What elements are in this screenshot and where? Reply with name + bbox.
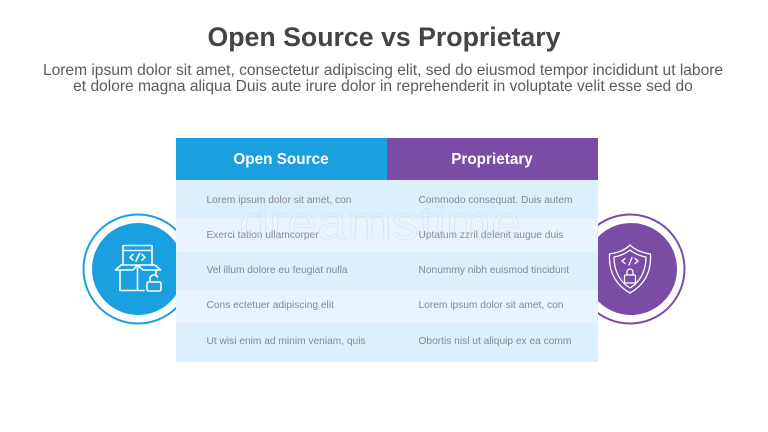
- header: proprietary: Proprietary: [451, 151, 533, 168]
- subtitle text: et dolore magna aliqua Duis aute irure dolor in reprehenderit in voluptate velit esse sed do: [73, 78, 693, 95]
- row 3: [176, 252, 598, 290]
- icon: shield with padlock: [609, 245, 651, 293]
- row 1: [176, 180, 598, 218]
- subtitle text: Lorem ipsum dolor sit amet, consectetur adipiscing elit, sed do eiusmod tempor incididunt ut labore: [43, 62, 723, 79]
- row 5: Obortis nisl ut aliquip ex ea comm: [418, 336, 571, 347]
- row 1: Lorem ipsum dolor sit amet, con: [206, 195, 351, 206]
- watermark: dreamstime: [239, 197, 521, 250]
- row 4: [176, 290, 598, 323]
- title: Open Source vs Proprietary: [208, 22, 560, 52]
- row 3: Vel illum dolore eu feugiat nulla: [206, 265, 348, 276]
- header: proprietary: [386, 138, 598, 180]
- subtitle text: [43, 62, 723, 95]
- icon badge: open source: [82, 214, 176, 324]
- row 4: Cons ectetuer adipiscing elit: [206, 300, 334, 311]
- row 1: Commodo consequat. Duis autem: [418, 195, 573, 206]
- row 2: Uptatum zzril delenit augue duis: [418, 230, 563, 241]
- header: open source: [176, 138, 386, 180]
- row 3: Nonummy nibh euismod tincidunt: [418, 265, 569, 276]
- comparison table: [176, 138, 598, 362]
- row 5: [176, 323, 598, 362]
- row 4: Lorem ipsum dolor sit amet, con: [418, 300, 563, 311]
- row 2: [176, 218, 598, 252]
- row 5: Ut wisi enim ad minim veniam, quis: [206, 336, 366, 347]
- row 2: Exerci tation ullamcorper: [206, 230, 319, 241]
- icon: code box with padlock: [116, 246, 161, 291]
- icon badge: proprietary: [598, 214, 686, 324]
- header: open source: Open Source: [233, 151, 329, 168]
